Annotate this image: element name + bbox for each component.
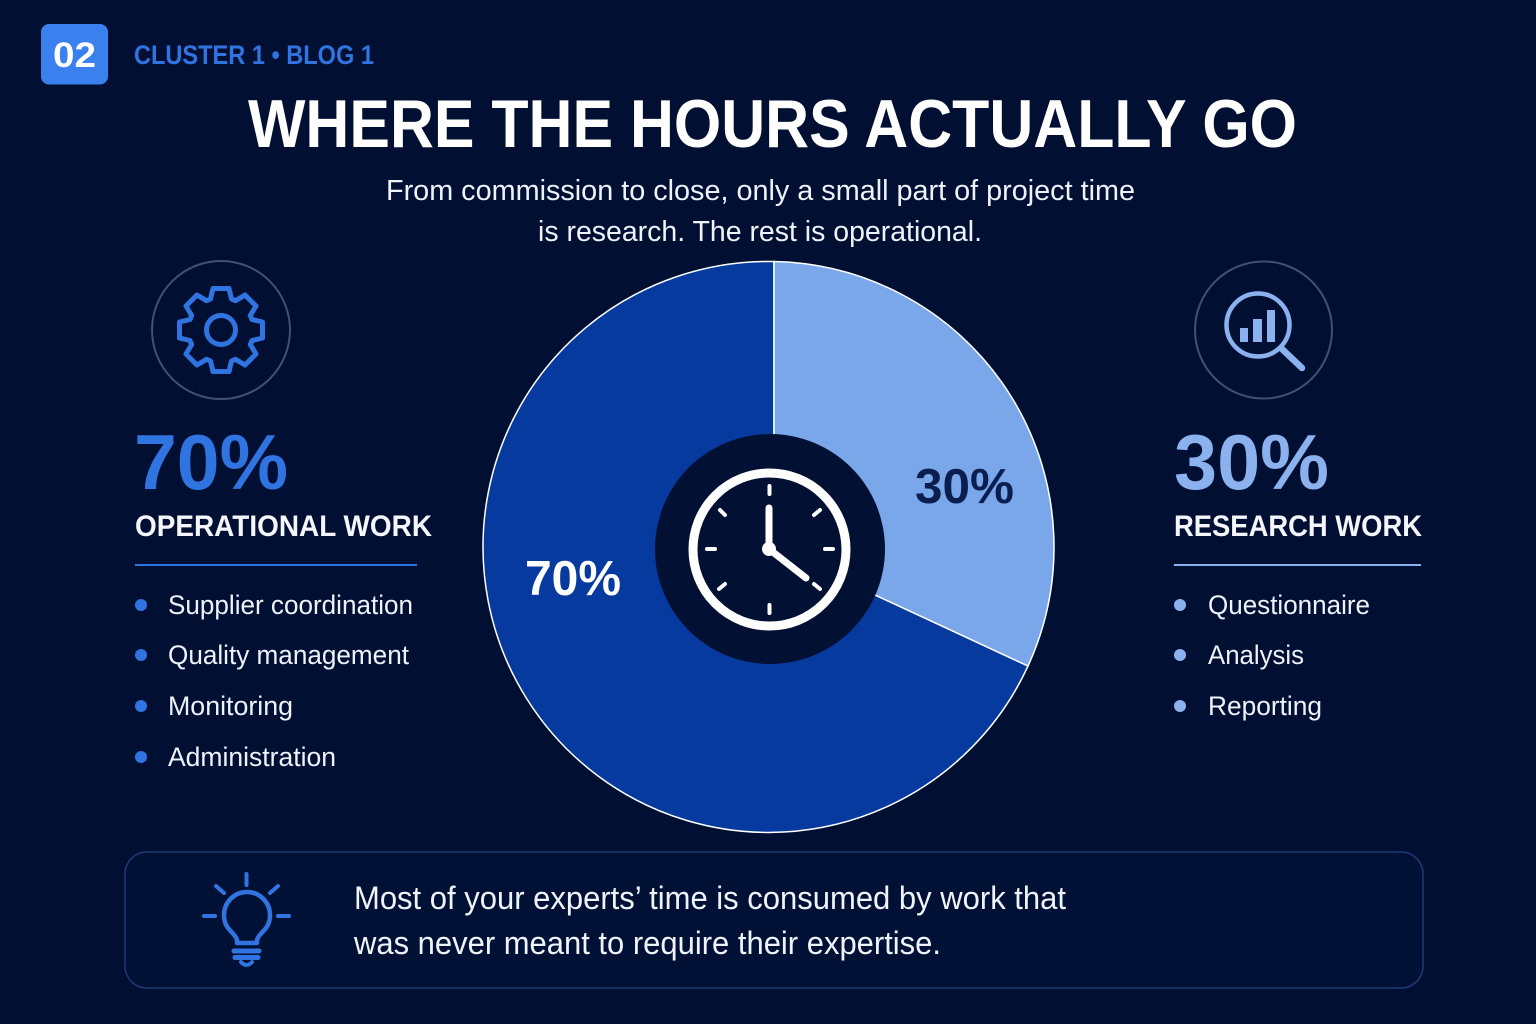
panel: operational work bbox=[134, 261, 432, 772]
title: WHERE THE HOURS ACTUALLY GO bbox=[248, 86, 1297, 162]
list: research tasks bbox=[1174, 590, 1370, 721]
callout text: was never meant to require their expertise. bbox=[353, 925, 941, 961]
stat: 70%: 70% bbox=[134, 418, 288, 506]
eyebrow label: CLUSTER 1 • BLOG 1 bbox=[134, 40, 374, 70]
underline bbox=[1174, 564, 1421, 566]
subtitle bbox=[386, 175, 1135, 248]
heading: research work: RESEARCH WORK bbox=[1174, 510, 1422, 543]
list: operational tasks: Quality management bbox=[168, 640, 409, 670]
stat: 30%: 30% bbox=[1174, 418, 1329, 506]
callout text bbox=[353, 880, 1066, 961]
icon: clock bbox=[655, 434, 885, 664]
heading: operational work: OPERATIONAL WORK bbox=[135, 510, 432, 543]
panel: research work bbox=[1174, 262, 1422, 721]
pie label: 70%: 70% bbox=[525, 552, 621, 606]
list: operational tasks bbox=[135, 590, 413, 772]
list: operational tasks: Monitoring bbox=[168, 691, 293, 721]
list: research tasks: Analysis bbox=[1208, 640, 1304, 670]
slice: research 30% bbox=[774, 262, 1054, 666]
subtitle: is research. The rest is operational. bbox=[538, 216, 982, 248]
list: operational tasks: Supplier coordination bbox=[168, 590, 413, 620]
icon: gear bbox=[152, 261, 290, 399]
underline bbox=[135, 564, 417, 566]
icon: magnifier with bars bbox=[1195, 262, 1332, 398]
callout text: Most of your experts’ time is consumed by work that bbox=[354, 880, 1066, 916]
badge: section number bbox=[41, 24, 108, 84]
list: research tasks: Questionnaire bbox=[1208, 590, 1370, 620]
list: research tasks: Reporting bbox=[1208, 691, 1322, 721]
callout: key takeaway bbox=[125, 852, 1423, 988]
list: operational tasks: Administration bbox=[168, 742, 336, 772]
slice: operational 70% bbox=[483, 261, 1028, 832]
icon: light bulb bbox=[204, 874, 289, 965]
badge: section number: 02 bbox=[53, 36, 96, 75]
pie label: 30%: 30% bbox=[915, 460, 1014, 514]
subtitle: From commission to close, only a small part of project time bbox=[386, 175, 1135, 207]
pie chart: 70/30 split bbox=[483, 261, 1054, 832]
